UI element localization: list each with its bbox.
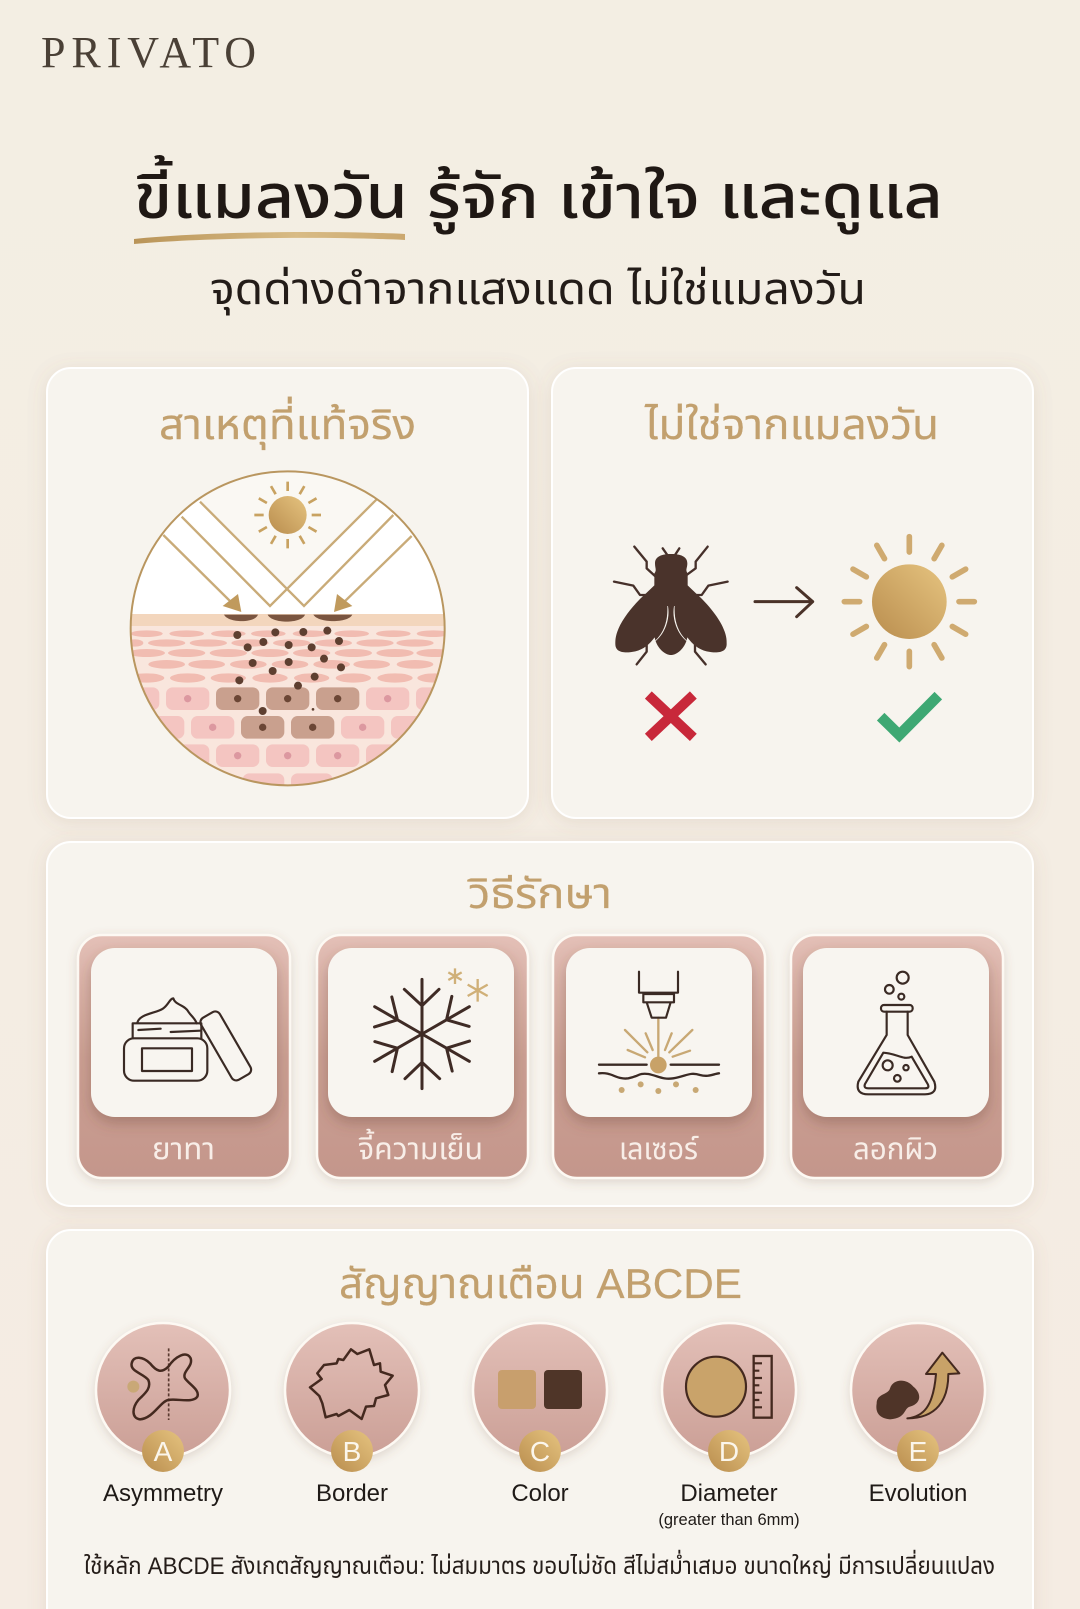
panel: ABCDE warning signs [47, 1230, 1033, 1609]
item: diameter: Diameter [680, 1480, 778, 1507]
card: cryotherapy [317, 935, 528, 1178]
heading: ABCDE: สัญญาณเตือน ABCDE [339, 1260, 742, 1307]
card: topical cream [78, 935, 290, 1178]
item: diameter: (greater than 6mm) [658, 1511, 800, 1529]
item: evolution: E [909, 1436, 927, 1467]
icon: red cross [648, 695, 693, 737]
summary text: ใช้หลัก ABCDE สังเกตสัญญาณเตือน: ไม่สมมาตร ขอบไม่ชัด สีไม่สม่ำเสมอ ขนาดใหญ่ มีการเปลี่ยนแปลง [84, 1549, 995, 1580]
item: color: C [530, 1436, 550, 1467]
subtitle: จุดด่างดำจากแสงแดด ไม่ใช่แมลงวัน [210, 265, 866, 316]
item: asymmetry: A [154, 1436, 173, 1467]
label: เลเซอร์ [619, 1133, 699, 1166]
item: evolution [851, 1323, 985, 1507]
icon: green check [881, 696, 938, 735]
icon: sun [844, 537, 974, 667]
panel: treatments [47, 842, 1033, 1206]
item: border [285, 1323, 419, 1507]
item: border: B [343, 1436, 361, 1467]
illustration: sun rays penetrating skin [130, 470, 446, 786]
title: ขี้แมลงวัน รู้จัก เข้าใจ และดูแล [134, 154, 943, 235]
arrow [755, 588, 813, 617]
card: chemical peel [791, 935, 1003, 1178]
item: color [473, 1323, 607, 1507]
label: จี้ความเย็น [358, 1128, 483, 1166]
item: asymmetry [96, 1323, 230, 1507]
heading: true cause: สาเหตุที่แท้จริง [159, 396, 416, 450]
title underline [134, 232, 405, 244]
label: ลอกผิว [853, 1133, 938, 1166]
item: diameter [658, 1323, 800, 1529]
heading: not from flies: ไม่ใช่จากแมลงวัน [644, 401, 939, 448]
icon: laser [599, 972, 719, 1094]
panel: true cause [47, 368, 528, 818]
icon: flask [858, 972, 935, 1094]
card: laser [553, 935, 765, 1178]
item: color: Color [511, 1480, 569, 1507]
brand logo: PRIVATO [41, 28, 256, 77]
item: diameter: D [719, 1436, 739, 1467]
item: asymmetry: Asymmetry [103, 1480, 223, 1507]
heading: treatments: วิธีรักษา [467, 870, 612, 917]
item: border: Border [316, 1480, 388, 1507]
icon: snowflake [366, 968, 488, 1089]
icon: cream jar [124, 998, 253, 1082]
panel: not from flies [552, 368, 1033, 818]
icon: fly [614, 547, 728, 664]
label: ยาทา [152, 1133, 215, 1166]
item: evolution: Evolution [869, 1480, 967, 1507]
